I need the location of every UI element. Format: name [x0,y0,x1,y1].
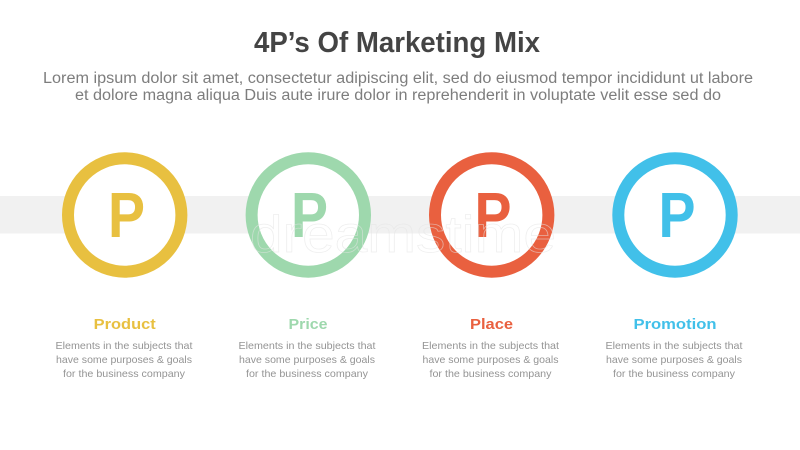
column: promotion: Promotion [634,316,716,333]
title: 4P’s Of Marketing Mix [254,27,540,59]
column: promotion: have some purposes & goals [606,354,742,366]
circle: promotion [618,158,732,272]
circle: place [435,158,548,272]
column: price: Price [288,316,328,333]
subtitle text: Lorem ipsum dolor sit amet, consectetur adipiscing elit, sed do eiusmod tempor incididunt ut labore [43,70,753,87]
column: place: Place [470,316,513,333]
column: place [422,316,559,380]
column: price [238,316,376,380]
column: promotion: Elements in the subjects that [606,340,743,352]
subtitle text: et dolore magna aliqua Duis aute irure dolor in reprehenderit in voluptate velit esse sed do [75,87,721,104]
circle: promotion: P [658,179,696,251]
column: product: Product [94,316,156,333]
circle: price: P [291,179,328,251]
column: product: for the business company [63,368,186,380]
column: place: for the business company [430,368,552,380]
column: product: Elements in the subjects that [56,340,193,352]
watermark: dreamstime [250,206,556,264]
circle: product [68,158,181,272]
column: place: have some purposes & goals [422,354,558,366]
column: product [56,316,193,380]
column: price: for the business company [246,368,369,380]
column: promotion [606,316,743,380]
column: promotion: for the business company [613,368,736,380]
column: place: Elements in the subjects that [422,340,559,352]
column: product: have some purposes & goals [56,354,192,366]
background band [0,196,800,234]
column: price: have some purposes & goals [239,354,375,366]
column: price: Elements in the subjects that [238,340,376,352]
circle: place: P [474,179,512,251]
circle: product: P [108,179,145,251]
subtitle text [43,70,753,104]
circle: price [252,158,365,272]
